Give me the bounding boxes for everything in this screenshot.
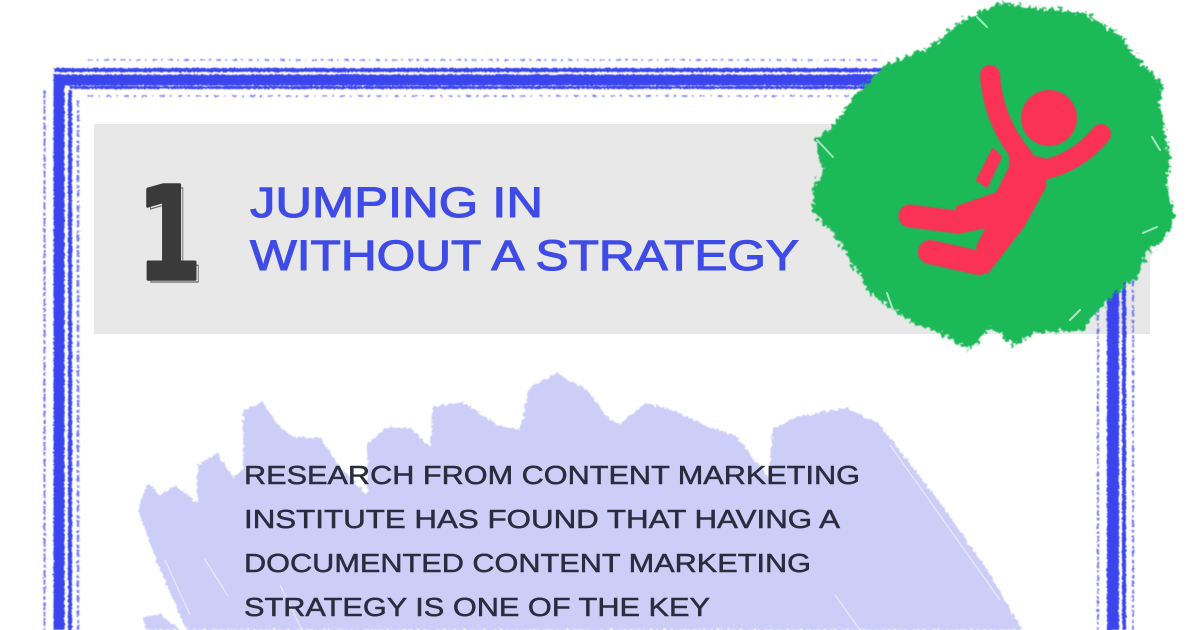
icon badge: green paint splat <box>813 2 1175 350</box>
body text: DOCUMENTED CONTENT MARKETING <box>244 548 811 578</box>
body text <box>244 460 860 622</box>
heading <box>250 179 799 280</box>
header panel <box>94 124 1150 334</box>
heading: WITHOUT A STRATEGY <box>250 232 799 280</box>
body text: INSTITUTE HAS FOUND THAT HAVING A <box>244 504 841 534</box>
body text: STRATEGY IS ONE OF THE KEY <box>244 592 710 622</box>
step number 1: 1 <box>140 163 205 313</box>
heading: JUMPING IN <box>250 179 543 227</box>
step number 1: 1 <box>137 160 202 310</box>
body text: RESEARCH FROM CONTENT MARKETING <box>244 460 860 490</box>
icon: falling person <box>910 75 1101 273</box>
brush streaks <box>165 445 1000 630</box>
brush stroke background <box>138 373 1022 630</box>
